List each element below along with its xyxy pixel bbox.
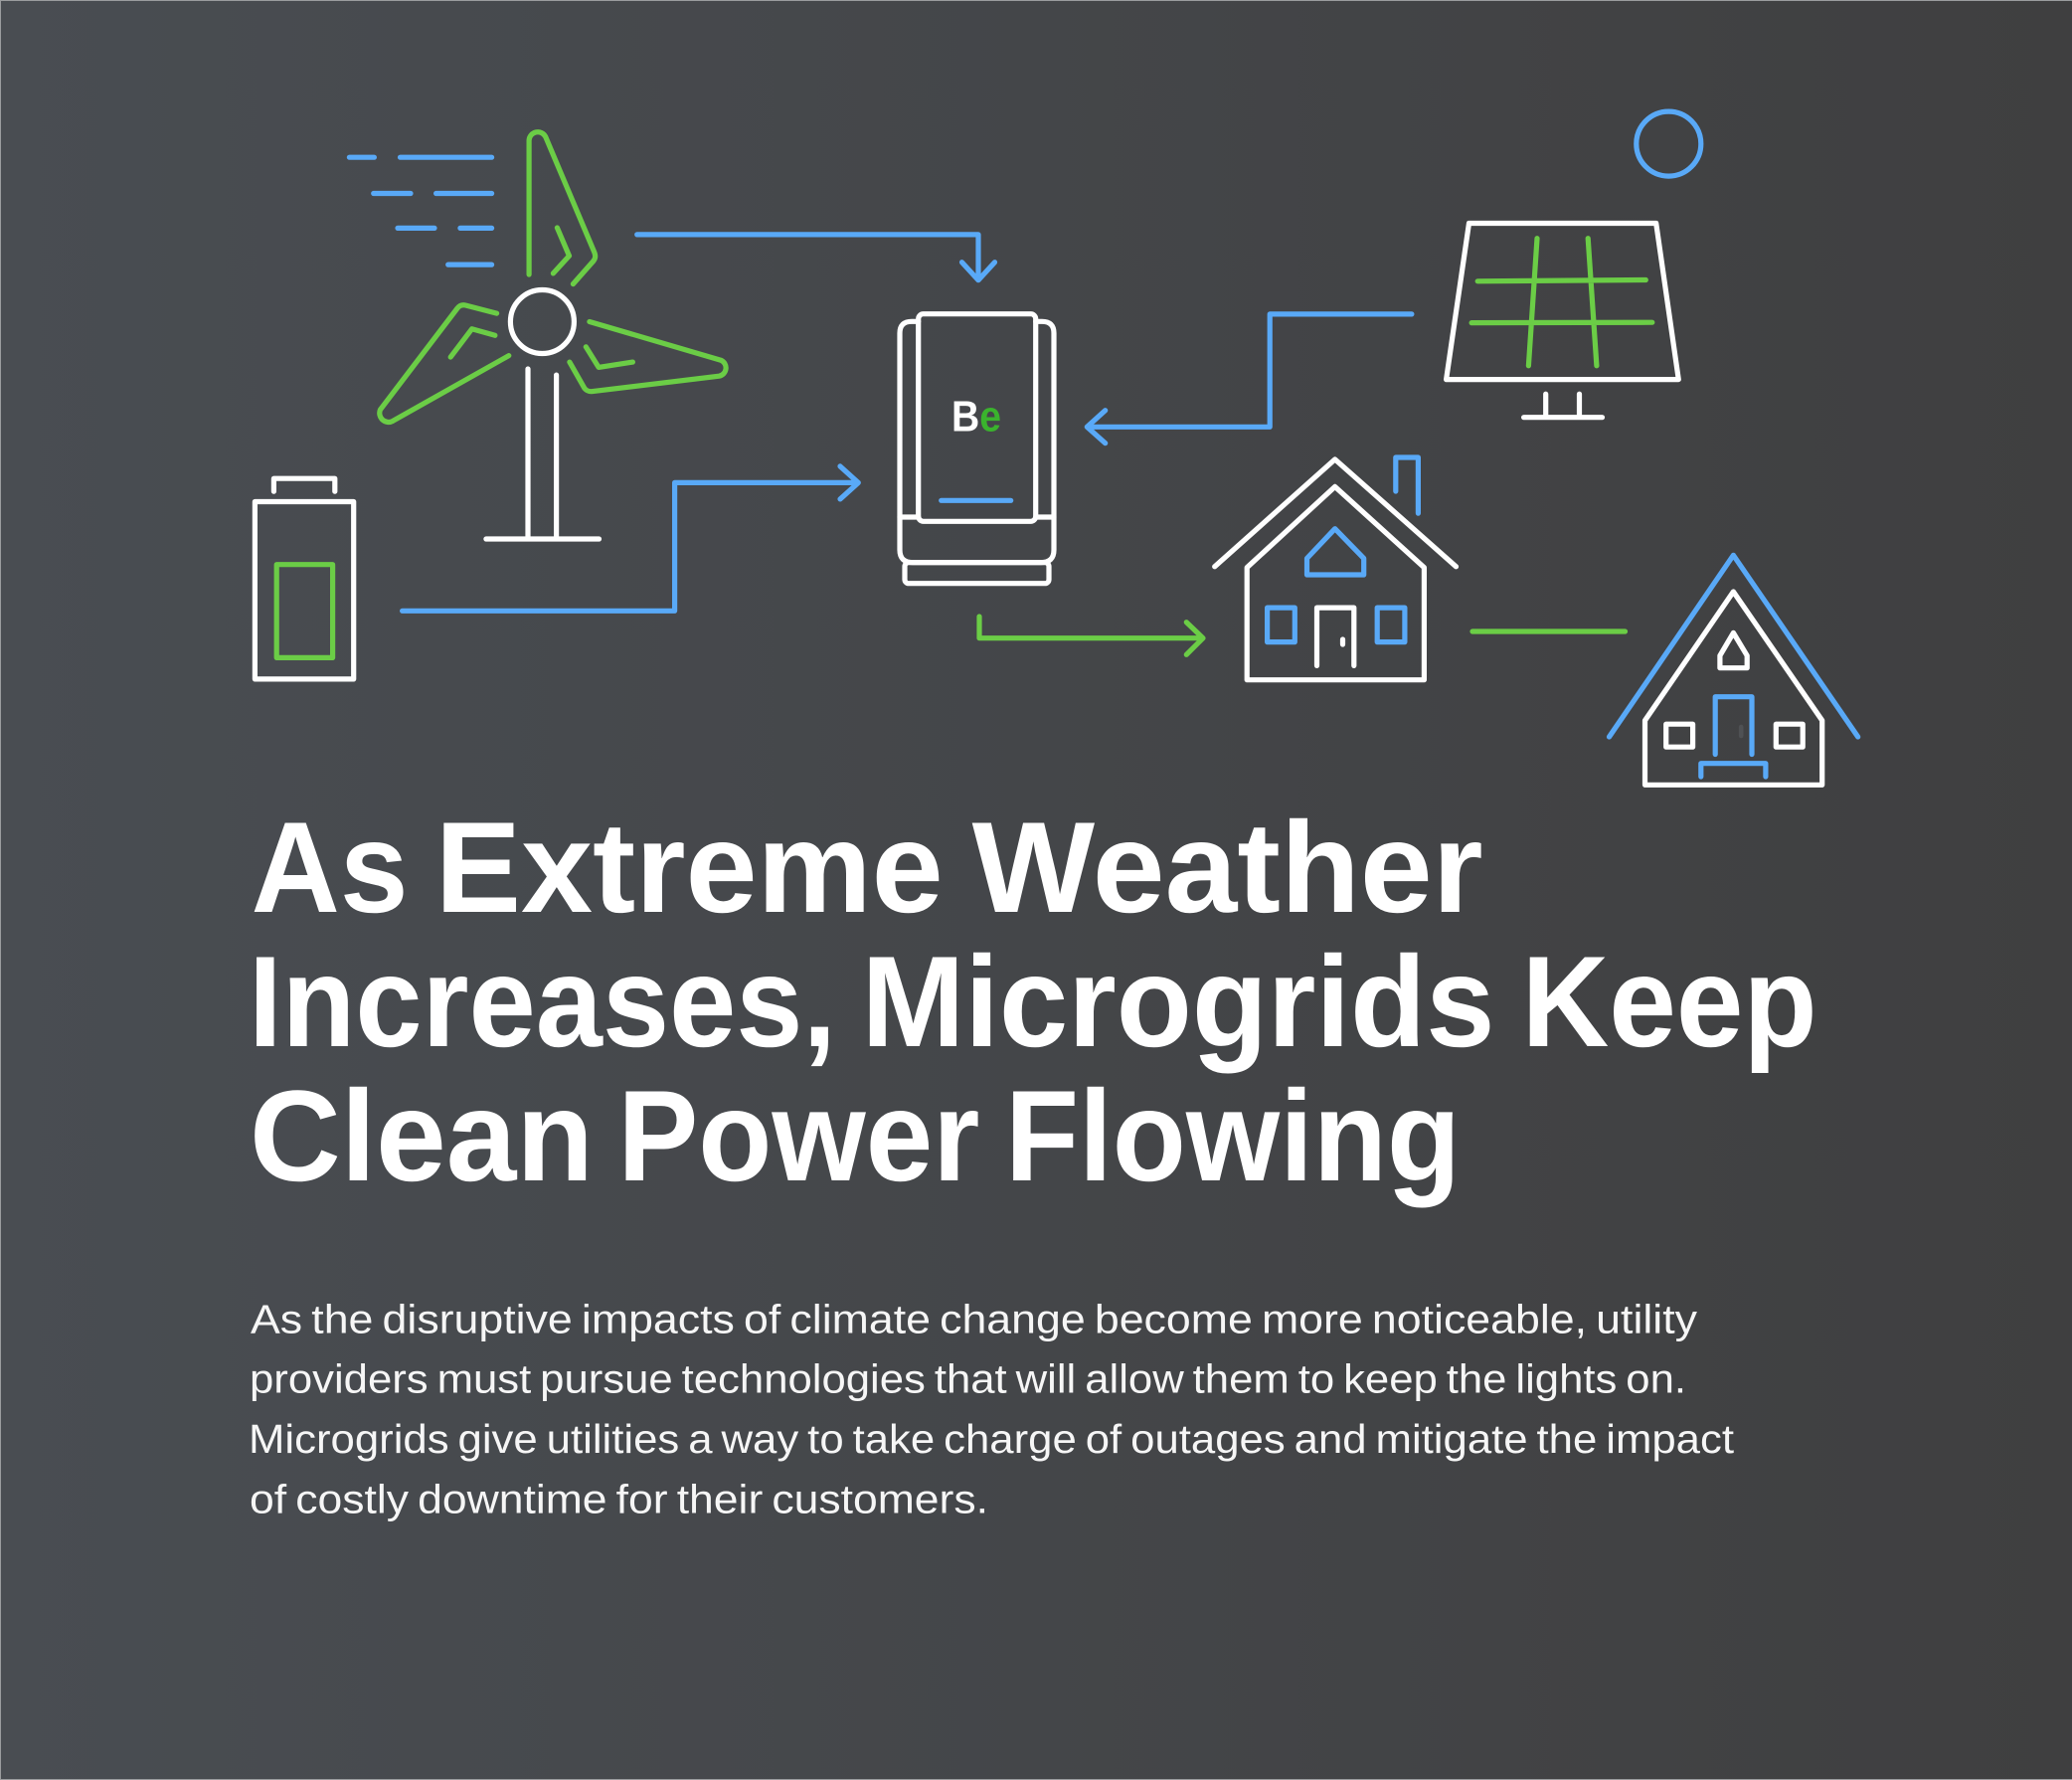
- title: Increases,: [249, 929, 836, 1074]
- title: As: [252, 795, 409, 940]
- arrow: solar panel to storage: [1087, 314, 1412, 444]
- body paragraph: providers must pursue technologies that will allow them to keep the lights on.: [250, 1356, 1686, 1402]
- arrow: turbine to storage: [637, 235, 994, 280]
- logo text: Be: [951, 392, 1001, 441]
- connector: house to house: [1472, 628, 1625, 634]
- icon: wind lines: [349, 157, 492, 265]
- body paragraph: of costly downtime for their customers.: [250, 1477, 988, 1522]
- title: Keep: [1522, 929, 1817, 1074]
- arrow: storage to house: [979, 617, 1203, 654]
- title: Clean: [250, 1063, 594, 1208]
- icon: first house: [1215, 457, 1456, 680]
- icon: battery: [255, 478, 354, 679]
- title: Flowing: [1005, 1063, 1461, 1208]
- icon: wind turbine: [380, 132, 726, 539]
- icon: sun: [1637, 111, 1701, 176]
- arrow: battery to storage: [403, 466, 858, 611]
- body paragraph: Microgrids give utilities a way to take charge of outages and mitigate the impact: [249, 1416, 1735, 1462]
- turbine hub, tower and base: [486, 290, 599, 539]
- title: Microgrids: [861, 929, 1495, 1074]
- title: Power: [617, 1063, 979, 1208]
- turbine blades: [380, 132, 726, 422]
- body paragraph: [249, 1297, 1735, 1522]
- icon: solar panel: [1447, 223, 1678, 418]
- icon: second house: [1609, 555, 1858, 785]
- icon: microgrid storage unit: [900, 314, 1054, 584]
- title: Weather: [972, 795, 1483, 940]
- title: Extreme: [435, 795, 944, 940]
- illustration: microgrid diagram: [255, 111, 1858, 785]
- body paragraph: As the disruptive impacts of climate change become more noticeable, utility: [251, 1297, 1698, 1342]
- title: [249, 795, 1817, 1208]
